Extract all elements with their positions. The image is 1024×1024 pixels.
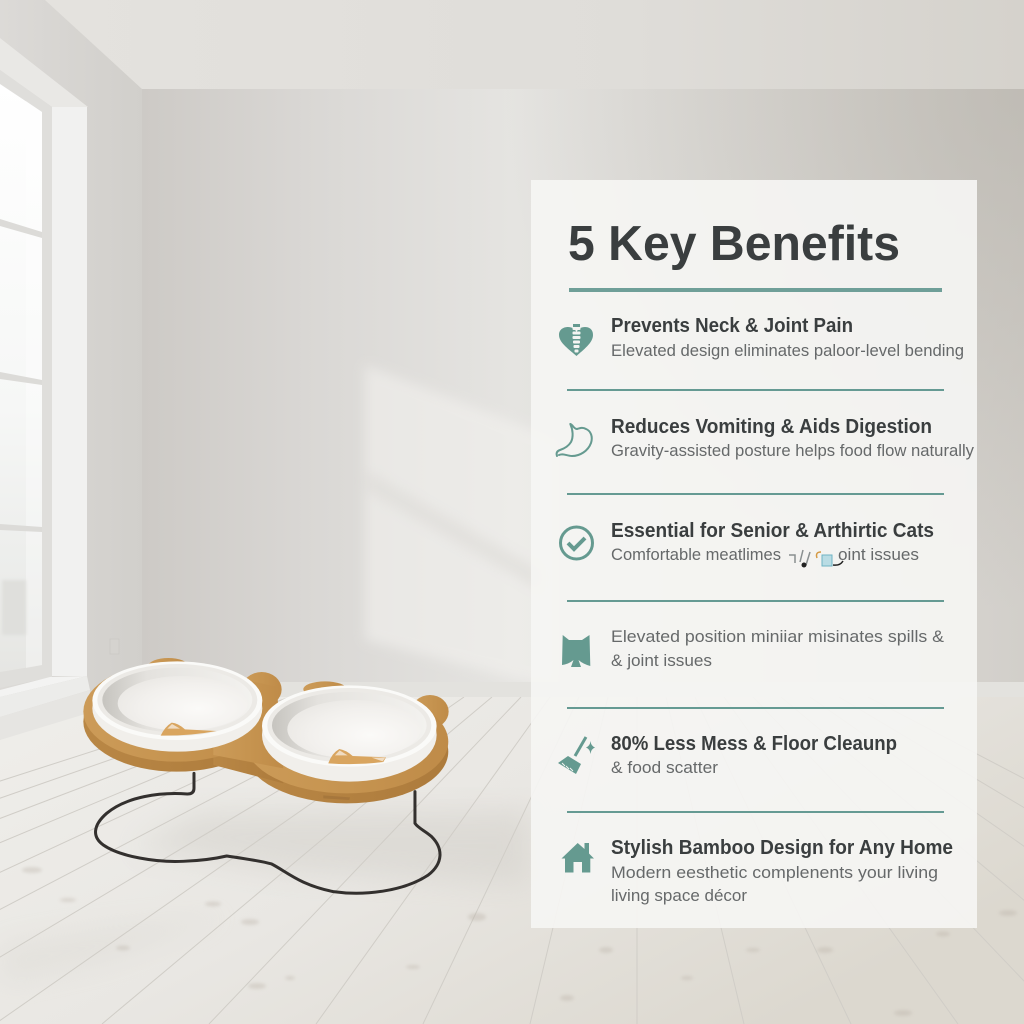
benefit 2: digestion: Gravity-assisted posture helps food flow naturally: [611, 442, 975, 460]
benefit 4: spills: Elevated position miniiar misinates spills &: [611, 628, 944, 646]
benefit 6: stylish design: Stylish Bamboo Design for Any Home: [611, 837, 953, 859]
icon: broom with sparkle: [558, 737, 595, 774]
benefit 5: less mess: & food scatter: [611, 759, 719, 777]
bamboo board: [83, 658, 449, 803]
benefit 5: less mess: 80% Less Mess & Floor Cleaunp: [611, 733, 897, 755]
icon: check circle: [560, 527, 592, 559]
title: 5 Key Benefits: [568, 217, 900, 271]
icon: house: [562, 843, 594, 872]
benefit 5: less mess: [558, 733, 897, 777]
benefit 1: neck and joint pain: [559, 315, 964, 360]
benefit 6: stylish design: Modern eesthetic complenents your living: [611, 864, 938, 882]
benefit 3: senior and arthritic cats: oint issues: [838, 546, 919, 564]
benefit 6: stylish design: [562, 837, 953, 905]
benefit 1: neck and joint pain: Prevents Neck & Joint Pain: [611, 315, 853, 337]
title rule: [569, 288, 942, 292]
icon: cat silhouette: [562, 635, 590, 667]
icon: heart with spine: [559, 324, 593, 356]
benefit 4: spills: & joint issues: [611, 652, 712, 670]
text glitch artifact: [789, 550, 843, 568]
product: elevated bamboo double cat bowl: [83, 658, 449, 893]
benefit 3: senior and arthritic cats: Comfortable meatlimes: [611, 546, 781, 564]
metal wire stand: [96, 773, 440, 893]
right ceramic bowl: [262, 685, 437, 782]
benefit 3: senior and arthritic cats: Essential for Senior & Arthirtic Cats: [611, 520, 934, 542]
benefit 2: digestion: [557, 416, 975, 460]
benefit 6: stylish design: living space décor: [611, 887, 748, 905]
benefit 2: digestion: Reduces Vomiting & Aids Digestion: [611, 416, 932, 438]
icon: stomach: [557, 424, 592, 456]
panel: 5 key benefits: [531, 180, 977, 928]
benefit 3: senior and arthritic cats: [560, 520, 934, 568]
benefit 4: spills: [562, 628, 944, 670]
benefit 1: neck and joint pain: Elevated design eliminates paloor-level bending: [611, 342, 964, 360]
left ceramic bowl: [92, 661, 262, 752]
